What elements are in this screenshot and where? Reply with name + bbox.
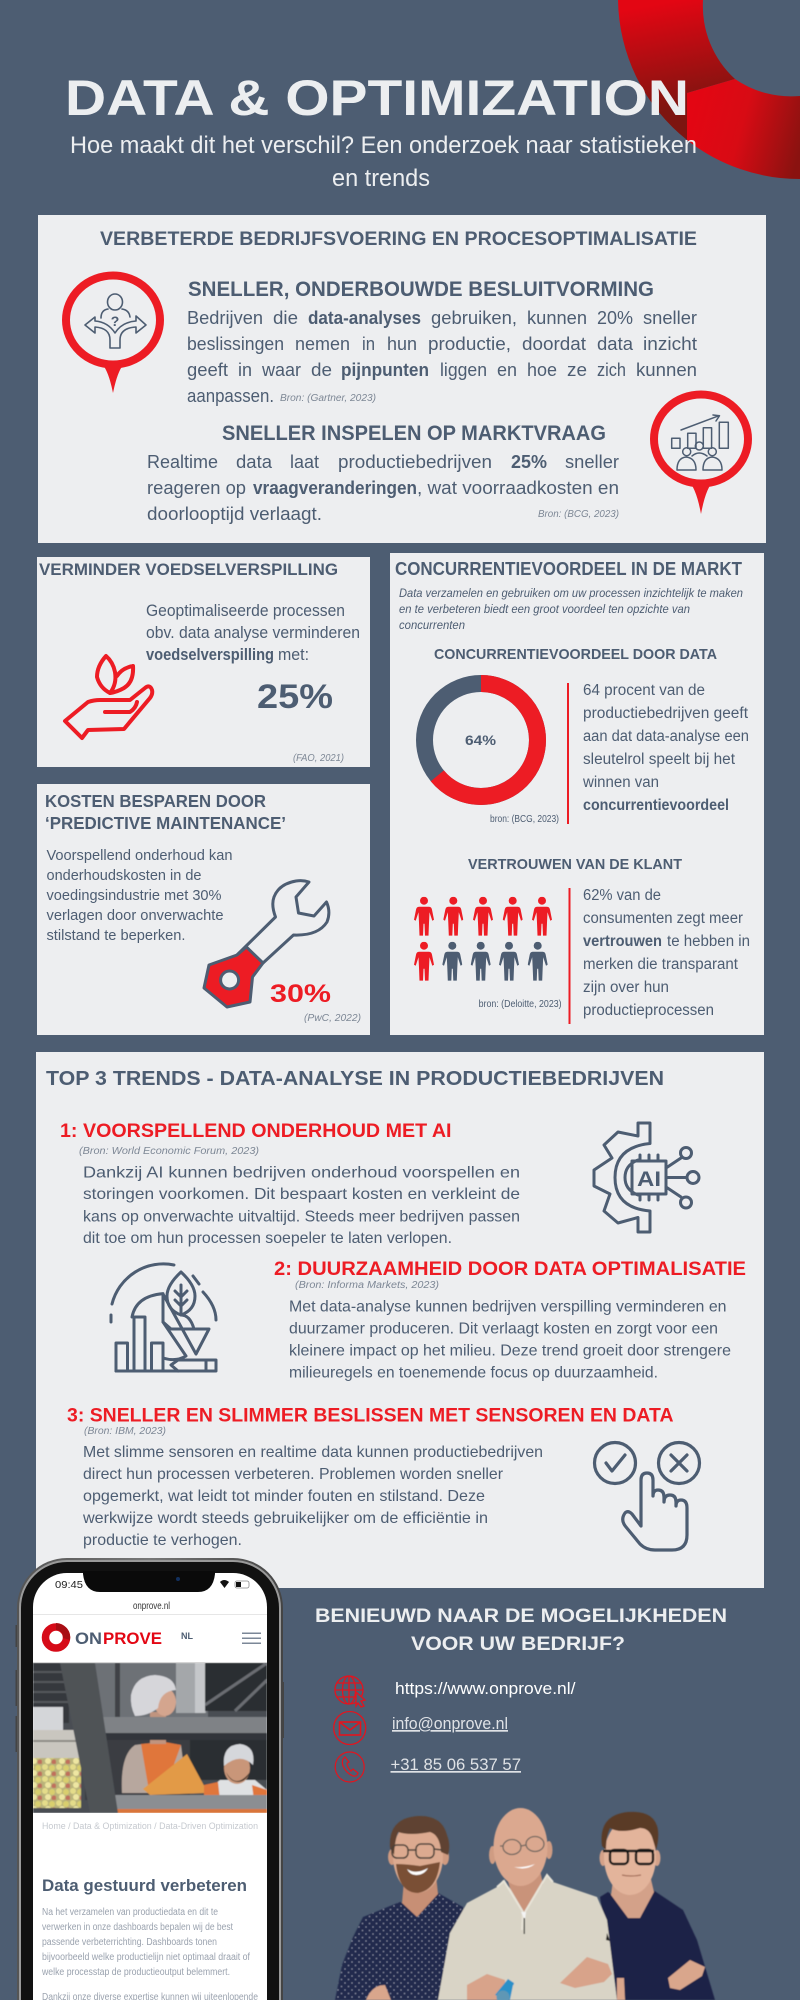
phone page text: welke processtap de productieoutput belemmert. <box>41 1967 230 1978</box>
heading: besluitvorming: SNELLER, ONDERBOUWDE BESLUITVORMING <box>188 278 654 301</box>
hamburger menu <box>242 1632 261 1644</box>
text block: besluitvorming: ze <box>567 360 587 380</box>
intro text <box>399 586 743 632</box>
text block: besluitvorming: liggen <box>440 360 487 380</box>
email link: info@onprove.nl <box>392 1714 508 1733</box>
text block: besluitvorming: die <box>273 308 298 328</box>
source: (PwC, 2022) <box>304 1013 361 1024</box>
trend 3 source: (Bron: IBM, 2023) <box>84 1426 166 1437</box>
text block: 62%: te hebben in <box>667 933 750 950</box>
text block: marktvraag: vraagveranderingen <box>253 478 417 498</box>
text block: besluitvorming: Bron: (Gartner, 2023) <box>280 392 376 404</box>
website link: https://www.onprove.nl/ <box>395 1679 576 1698</box>
stat 25%: 25% <box>257 678 333 716</box>
woman <box>122 1742 187 1793</box>
text block: obv. data analyse verminderen <box>146 624 360 642</box>
phone mockup <box>16 1558 284 2000</box>
call to action heading: VOOR UW BEDRIJF? <box>411 1633 625 1655</box>
text block: besluitvorming: sneller <box>643 308 697 328</box>
title: DATA & OPTIMIZATION <box>65 70 689 126</box>
text block: marktvraag: Realtime <box>147 452 218 472</box>
trend 1 text <box>83 1164 520 1247</box>
phone page text: bijvoorbeeld welke productielijn niet optimaal draait of <box>42 1952 250 1963</box>
heading: CONCURRENTIEVOORDEEL IN DE MARKT <box>395 559 742 579</box>
text block: besluitvorming: doordat <box>522 334 586 354</box>
text block: 62%: zijn over hun <box>583 979 669 996</box>
trend 1 text: dit toe om hun processen soepeler te laten verlopen. <box>83 1230 452 1247</box>
trend 1 text: storingen voorkomen. Dit bespaart kosten en verkleint de <box>83 1186 520 1203</box>
text block: marktvraag: sneller <box>565 452 619 472</box>
text block: verlagen door onverwachte <box>46 907 224 924</box>
folder <box>143 1754 208 1795</box>
trend 3 text: productie te verhogen. <box>83 1532 242 1549</box>
text block: besluitvorming: gebruiken, <box>431 308 517 328</box>
source: bron: (Deloitte, 2023) <box>479 999 562 1010</box>
trend 2 text: kleinere impact op het milieu. Deze trend groeit door strengere <box>289 1342 731 1359</box>
text block: besluitvorming: data-analyses <box>308 308 421 328</box>
trend 1 text: Dankzij AI kunnen bedrijven onderhoud voorspellen en <box>83 1164 520 1182</box>
text block: met: <box>278 646 309 664</box>
trend 3 text: direct hun processen verbeteren. Problemen worden sneller <box>83 1466 504 1483</box>
text block: Voorspellend onderhoud kan <box>46 847 232 864</box>
logo: Onprove: ON <box>75 1629 102 1648</box>
panel: top 3 trends <box>36 1052 764 1588</box>
trend 1 text: kans op onverwachte uitvaltijd. Steeds meer bedrijven passen <box>83 1208 520 1225</box>
donut chart 64% <box>424 684 538 796</box>
text block <box>146 602 360 664</box>
text block: 62%: merken die transparant <box>583 956 739 973</box>
person center <box>438 1808 617 2000</box>
person left <box>335 1816 470 2000</box>
text block: 62%: consumenten zegt meer <box>583 910 743 927</box>
text block: besluitvorming: nemen <box>295 334 350 354</box>
heading: ‘PREDICTIVE MAINTENANCE’ <box>45 813 286 833</box>
phone page text: passende verbeterrichting. Dashboards tonen <box>42 1937 217 1948</box>
text block: besluitvorming: productie, <box>428 334 511 354</box>
text block: 62%: vertrouwen <box>583 933 662 950</box>
subheading: CONCURRENTIEVOORDEEL DOOR DATA <box>434 646 717 663</box>
text block: marktvraag <box>147 452 619 524</box>
subheading: VERTROUWEN VAN DE KLANT <box>468 856 682 873</box>
text block: besluitvorming: geeft <box>187 360 228 380</box>
trend 3 text: opgemerkt, wat leidt tot minder fouten en stilstand. Deze <box>83 1488 485 1505</box>
trend 1 heading: 1: VOORSPELLEND ONDERHOUD MET AI <box>60 1121 452 1142</box>
trend 3 heading: 3: SNELLER EN SLIMMER BESLISSEN MET SENSOREN EN DATA <box>67 1405 674 1426</box>
logo: Onprove: PROVE <box>103 1629 162 1648</box>
breadcrumb: Home / Data & Optimization / Data-Driven Optimization <box>42 1821 258 1831</box>
man <box>217 1779 267 1796</box>
panel: voedselverspilling <box>37 557 370 767</box>
status bar: 09:45 <box>55 1579 83 1591</box>
icon: decision pin: ? <box>111 313 119 329</box>
text block: marktvraag: data <box>236 452 273 472</box>
icon: AI gear: AI <box>637 1168 661 1191</box>
text block: besluitvorming: in <box>238 360 252 380</box>
intro text: en te verbeteren biedt een groot voordeel ten opzichte van <box>399 602 690 616</box>
text block: 64 procent <box>582 682 749 814</box>
red divider <box>568 888 570 1024</box>
status bar <box>55 1579 249 1591</box>
text block: besluitvorming <box>187 308 697 406</box>
panel: concurrentievoordeel <box>390 553 764 1035</box>
text block: besluitvorming: hun <box>387 334 417 354</box>
trend 3 text: Met slimme sensoren en realtime data kunnen productiebedrijven <box>83 1444 543 1461</box>
subtitle: Hoe maakt dit het verschil? Een onderzoek naar statistieken <box>70 132 697 159</box>
text block: besluitvorming: inzicht <box>643 334 697 354</box>
panel heading: TOP 3 TRENDS - DATA-ANALYSE IN PRODUCTIEBEDRIJVEN <box>46 1067 664 1090</box>
text block: voedingsindustrie met 30% <box>46 887 222 904</box>
icon: decision pin <box>66 276 160 393</box>
heading: marktvraag: SNELLER INSPELEN OP MARKTVRAAG <box>222 422 606 445</box>
text block: besluitvorming: aanpassen. <box>187 386 274 406</box>
trend 3 text <box>82 1444 543 1549</box>
text block: marktvraag: , wat voorraadkosten en <box>417 478 619 498</box>
source: bron: (BCG, 2023) <box>490 814 559 825</box>
text block: besluitvorming: de <box>311 360 332 380</box>
call to action heading: BENIEUWD NAAR DE MOGELIJKHEDEN <box>315 1605 727 1627</box>
phone link: +31 85 06 537 57 <box>390 1755 521 1774</box>
stat 30%: 30% <box>270 980 331 1008</box>
heading <box>45 791 286 833</box>
icon: sustainability chart <box>111 1264 216 1371</box>
logo: Onprove <box>46 1623 162 1648</box>
shelves <box>90 1717 267 1733</box>
phone page heading: Data gestuurd verbeteren <box>42 1876 247 1895</box>
text block: stilstand te beperken. <box>46 927 186 944</box>
heading: KOSTEN BESPAREN DOOR <box>45 791 266 811</box>
text block: besluitvorming: in <box>362 334 375 354</box>
phone page text: Na het verzamelen van productiedata en dit te <box>42 1907 218 1918</box>
text block: besluitvorming: en <box>497 360 517 380</box>
photo: three team members <box>335 1808 715 2000</box>
text block: 62%: 62% van de <box>583 887 661 904</box>
text block: Geoptimaliseerde processen <box>146 602 345 620</box>
text block: besluitvorming: kunnen <box>636 360 697 380</box>
text block: besluitvorming: beslissingen <box>187 334 284 354</box>
text block: 64 procent: sleutelrol speelt bij het <box>583 751 736 768</box>
phone page text: verwerken in onze dashboards bepalen wij de best <box>42 1922 233 1933</box>
icon: mail <box>334 1712 366 1744</box>
trend 2 text <box>289 1298 731 1382</box>
text block: 64 procent: 64 procent van de <box>583 682 705 699</box>
icon: wrench <box>204 881 329 1007</box>
text block: 62% <box>583 887 750 1019</box>
text block: marktvraag: 25% <box>511 452 547 472</box>
text block: besluitvorming: pijnpunten <box>341 360 429 380</box>
trend 2 text: Met data-analyse kunnen bedrijven verspilling verminderen en <box>289 1298 726 1315</box>
donut chart 64%: 64% <box>465 732 497 748</box>
text block: onderhoudskosten in de <box>46 867 202 884</box>
pictogram: 6 of 10 people <box>414 897 552 981</box>
notch <box>83 1571 215 1592</box>
trend 2 heading: 2: DUURZAAMHEID DOOR DATA OPTIMALISATIE <box>274 1259 746 1280</box>
text block: besluitvorming: waar <box>261 360 301 380</box>
panel: verbeterde bedrijfsvoering <box>38 215 766 543</box>
red divider <box>567 683 569 824</box>
text block: marktvraag: reageren op <box>147 478 246 498</box>
photo: factory workers <box>33 1663 267 1813</box>
call to action heading <box>315 1605 727 1655</box>
intro text: concurrenten <box>399 618 465 632</box>
text block: marktvraag: Bron: (BCG, 2023) <box>538 508 619 520</box>
text block: besluitvorming: hoe <box>527 360 557 380</box>
subtitle <box>70 132 697 192</box>
text block: 64 procent: aan dat data-analyse een <box>583 728 749 745</box>
subtitle: en trends <box>332 165 430 192</box>
text block: 64 procent: concurrentievoordeel <box>583 797 729 814</box>
source: (FAO, 2021) <box>293 753 344 764</box>
language label: NL <box>181 1631 193 1642</box>
text block: besluitvorming: data <box>597 334 634 354</box>
icon: phone <box>335 1752 364 1782</box>
trend 3 text: werkwijze wordt steeds gebruikelijker om de efficiëntie in <box>82 1510 488 1527</box>
text block: voedselverspilling <box>146 646 274 664</box>
text block: marktvraag: doorlooptijd verlaagt. <box>147 504 322 524</box>
text block: besluitvorming: kunnen <box>527 308 587 328</box>
heading: VERMINDER VOEDSELVERSPILLING <box>39 560 338 579</box>
icon: AI gear <box>594 1123 699 1232</box>
address bar: onprove.nl <box>133 1601 170 1612</box>
panel heading: VERBETERDE BEDRIJFSVOERING EN PROCESOPTIMALISATIE <box>100 229 697 250</box>
intro text: Data verzamelen en gebruiken om uw processen inzichtelijk te maken <box>399 586 743 600</box>
text block: 64 procent: winnen van <box>582 774 659 791</box>
trend 2 text: duurzamer produceren. Dit verlaagt kosten en zorgt voor een <box>289 1321 718 1338</box>
panel: predictive maintenance <box>37 784 370 1035</box>
person right <box>600 1812 715 2000</box>
trend 2 source: (Bron: Informa Markets, 2023) <box>295 1280 439 1291</box>
text block: 62%: productieprocessen <box>583 1002 714 1019</box>
text block: marktvraag: productiebedrijven <box>338 452 492 472</box>
decorative red ring <box>618 0 800 179</box>
text block: marktvraag: laat <box>290 452 319 472</box>
text block <box>46 847 232 944</box>
text block: besluitvorming: 20% <box>597 308 633 328</box>
icon: globe <box>335 1676 365 1707</box>
text block: besluitvorming: zich <box>597 360 626 380</box>
trend 1 source: (Bron: World Economic Forum, 2023) <box>79 1146 259 1157</box>
text block: 64 procent: productiebedrijven geeft <box>583 705 749 722</box>
phone page text <box>41 1907 258 2000</box>
icon: growth pin <box>654 394 748 514</box>
icon: hand with check and cross <box>594 1442 700 1550</box>
icon: hand with leaves <box>65 656 152 738</box>
text block: besluitvorming: Bedrijven <box>187 308 263 328</box>
trend 2 text: milieuregels en toenemende focus op duurzaamheid. <box>289 1364 658 1382</box>
